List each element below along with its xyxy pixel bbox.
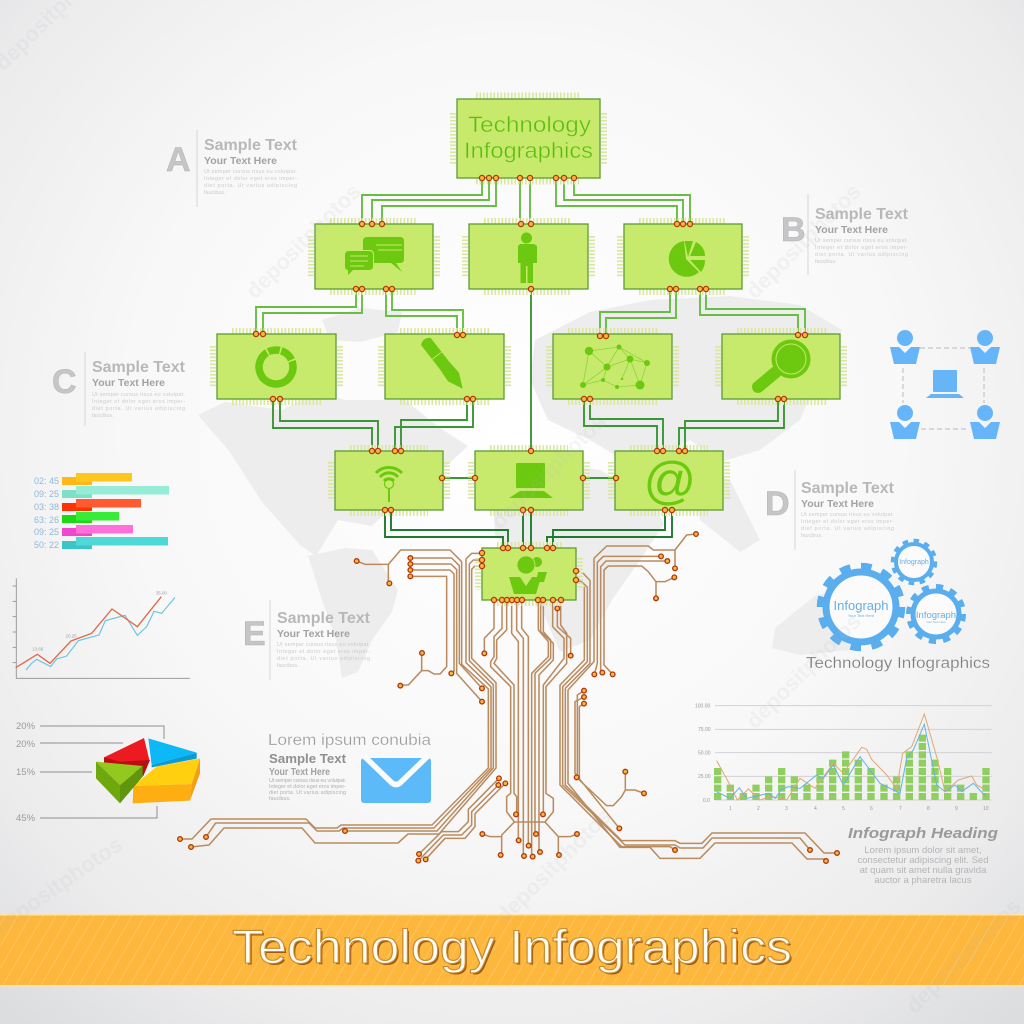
watermark: depositphotos [486,409,611,534]
watermark: depositphotos [491,804,616,929]
circuit tree roots and trunk [178,532,839,863]
lorem ipsum mail block: Lorem ipsum conubia [268,732,431,749]
bar and line chart: 25.00 [698,774,711,780]
bottom banner: Technology Infographics [234,922,794,975]
chip: computer [471,448,587,513]
connector pads [253,175,808,603]
horizontal bar chart: 02: 45 [34,476,59,486]
3D pie chart: 45% [16,813,36,824]
gears: Infograph [834,598,888,613]
icon: person top left [890,330,920,364]
icon: envelope [361,756,431,803]
block C: diet porta. Ut varius adipiscing [92,406,185,412]
network diagram [890,330,1000,439]
bar and line chart: 3 [785,806,788,812]
gears: Infograph [899,559,929,566]
chip: title: Infographics [464,138,593,163]
block B: diet porta. Ut varius adipiscing [815,252,908,258]
3D pie chart: 20% [16,721,36,732]
chip: at sign: @ [643,452,695,510]
block E: faucibus. [277,663,299,669]
block D: diet porta. Ut varius adipiscing [801,526,894,532]
block A: Integer et dolor eget eros imper- [204,176,297,182]
block E: Ut semper cursus risus eu volutpat. [277,642,370,648]
chip: at sign [611,448,727,513]
block D: Integer et dolor eget eros imper- [801,519,894,525]
chip: title [453,96,604,182]
block A: diet porta. Ut varius adipiscing [204,183,297,189]
chip: person [465,221,592,292]
horizontal bar chart: 50: 22 [34,540,59,550]
chip: donut chart [213,331,340,402]
bar and line chart: 100.00 [695,704,711,710]
bar and line chart: 7 [899,806,902,812]
block C: C [52,363,77,401]
lorem ipsum mail block: faucibus. [269,796,291,802]
horizontal bar chart: 09: 25 [34,489,59,499]
infograph heading block: consectetur adipiscing elit. Sed [858,855,988,866]
block B: faucibus. [815,259,837,265]
icon: laptop [926,370,964,398]
bar and line chart [695,704,992,812]
chip: chat bubbles [311,221,437,292]
watermark: depositphotos [901,894,1024,1019]
chip: network [549,331,676,402]
bar and line chart: 0.0 [703,798,710,804]
lorem ipsum mail block: diet porta. Ut varius adipiscing [269,790,346,796]
icon: person top right [970,330,1000,364]
block E: E [243,615,266,653]
block D: Your Text Here [801,498,874,510]
block C [52,352,185,426]
lorem ipsum mail block: Your Text Here [269,766,330,778]
block B: Ut semper cursus risus eu volutpat. [815,238,908,244]
block E: Sample Text [277,610,370,627]
bar and line chart: 1 [729,806,732,812]
lorem ipsum mail block [268,732,431,803]
bar and line chart: 9 [955,806,958,812]
3D pie chart: 15% [16,767,36,778]
gears: Your Text Here [848,613,875,618]
block E: diet porta. Ut varius adipiscing [277,656,370,662]
line chart: 35.00 [156,590,167,595]
bar and line chart: 75.00 [698,727,711,733]
block C: Your Text Here [92,377,165,389]
watermark: depositphotos [241,179,366,304]
gears: Technology Infographics [806,655,990,672]
bar and line chart: 50.00 [698,750,711,756]
3D pie chart [16,721,200,824]
gears: Your Text Here [926,620,946,624]
bar and line chart: 4 [814,806,817,812]
horizontal bar chart: 63: 26 [34,515,59,525]
block C: faucibus. [92,413,114,419]
block E: Your Text Here [277,628,350,640]
block D [765,470,894,550]
icon: person bottom right [970,405,1000,439]
gears: Infograph [916,610,956,621]
watermark: depositphotos [741,179,866,304]
block C: Sample Text [92,359,185,376]
green connector traces [256,178,805,548]
lorem ipsum mail block: Integer et dolor eget eros imper- [269,784,346,790]
bar and line chart: 8 [927,806,930,812]
block A: faucibus. [204,190,226,196]
bar and line chart: 2 [757,806,760,812]
bar and line chart: 5 [842,806,845,812]
block D: Ut semper cursus risus eu volutpat. [801,512,894,518]
block B: Sample Text [815,206,908,223]
line chart [13,578,190,678]
block B: B [781,211,806,249]
block A: Your Text Here [204,155,277,167]
world map [198,296,868,678]
block A: Sample Text [204,137,297,154]
3D pie chart: 20% [16,739,36,750]
lorem ipsum mail block: Ut semper cursus risus eu volutpat. [269,778,346,784]
block C: Integer et dolor eget eros imper- [92,399,185,405]
horizontal bar chart: 03: 38 [34,502,59,512]
infograph heading block: Lorem ipsum dolor sit amet, [864,845,982,856]
block B: Integer et dolor eget eros imper- [815,245,908,251]
line chart: 20.25 [66,634,77,639]
chip: wifi antenna [331,448,447,513]
line chart: 13.66 [32,647,44,652]
chip: pie chart [620,221,746,292]
block D: faucibus. [801,533,823,539]
icon: person bottom left [890,405,920,439]
chip: pen [381,331,508,402]
infograph heading block [848,825,998,886]
horizontal bar chart: 09: 25 [34,527,59,537]
infograph heading block: Infograph Heading [848,825,998,842]
horizontal bar chart [34,473,169,550]
block D: Sample Text [801,480,894,497]
chip: central users [478,545,580,603]
watermark: depositphotos [741,609,866,734]
block B: Your Text Here [815,224,888,236]
block A: Ut semper cursus risus eu volutpat. [204,169,297,175]
gears [806,540,990,672]
bar and line chart: 10 [983,806,989,812]
infograph heading block: auctor a pharetra lacus [874,875,972,886]
chip: magnifier [718,331,844,402]
block D: D [765,485,790,523]
block A [166,130,297,207]
block E [243,600,370,680]
block C: Ut semper cursus risus eu volutpat. [92,392,185,398]
block B [781,194,908,275]
infograph heading block: at quam sit amet nulla gravida [860,865,987,876]
bottom banner: Technology Infographics [232,920,792,973]
lorem ipsum mail block: Sample Text [269,751,347,766]
chip: title: Technology [468,112,591,137]
block A: A [166,141,191,179]
bottom banner [0,914,1024,986]
bar and line chart: 6 [870,806,873,812]
block E: Integer et dolor eget eros imper- [277,649,370,655]
